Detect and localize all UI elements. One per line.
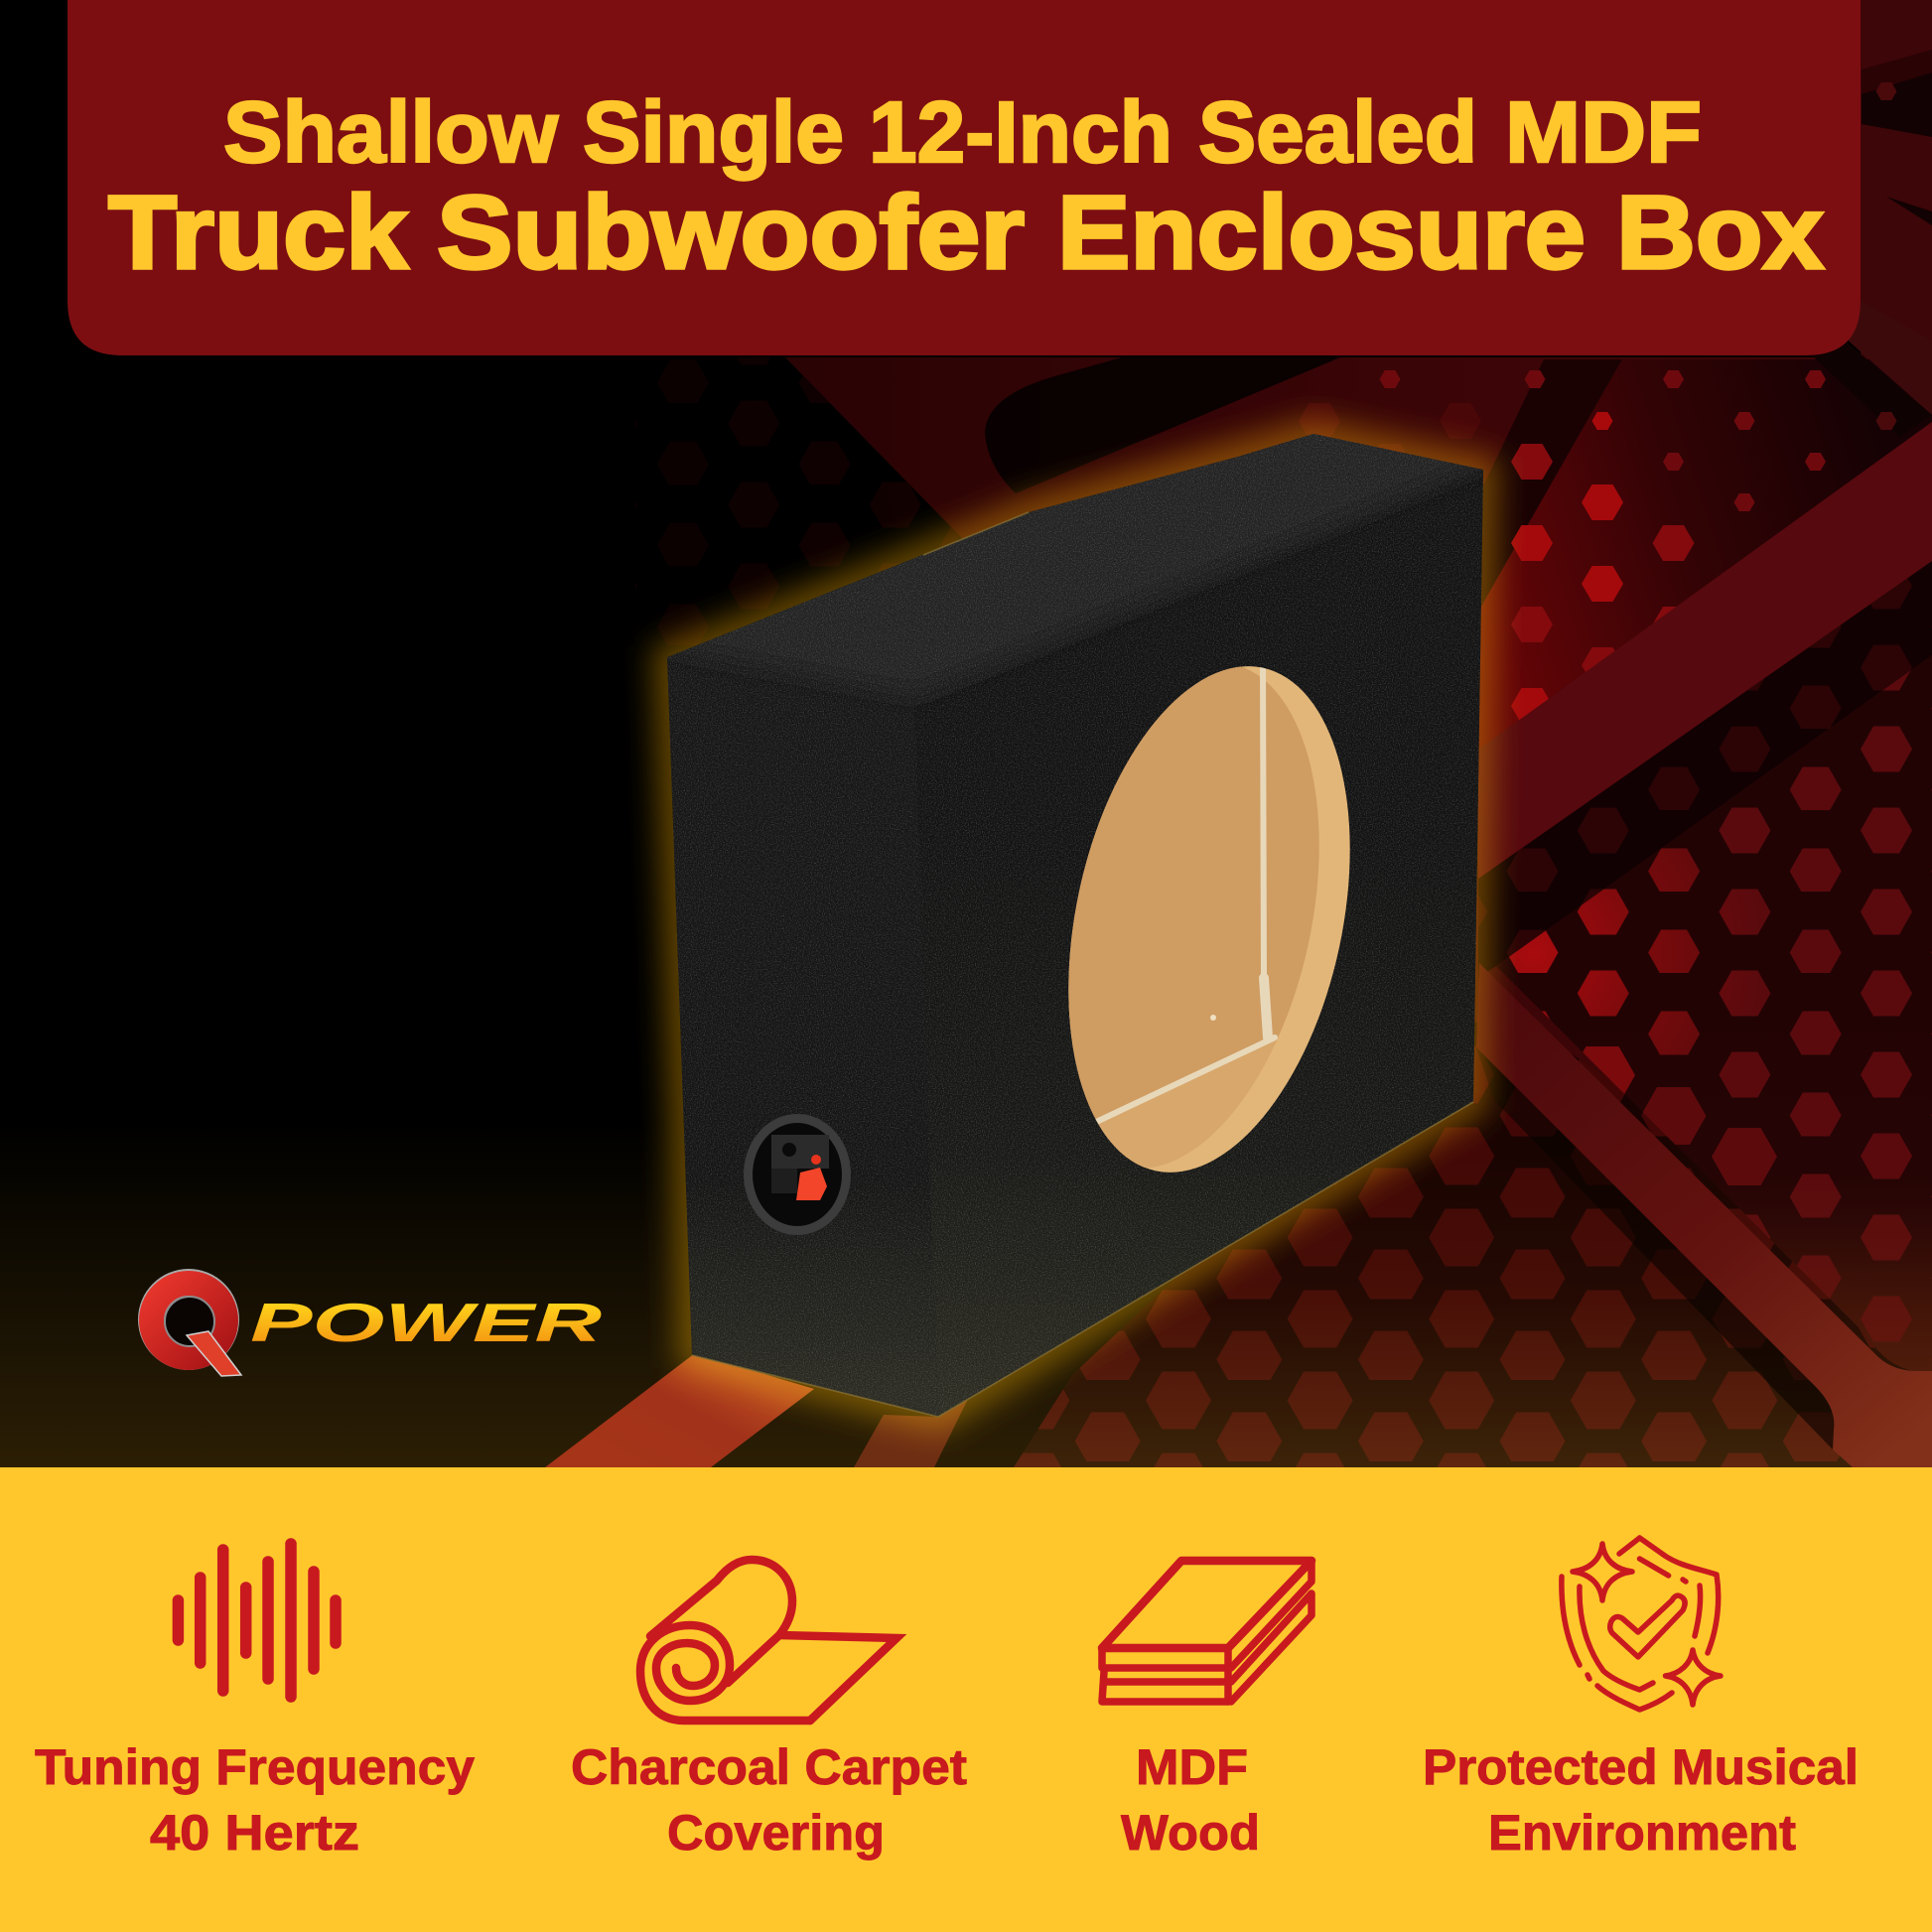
label: charcoal carpet: Charcoal Carpet <box>571 1739 967 1795</box>
title line one: Sealed <box>1198 84 1477 181</box>
label: tuning frequency <box>35 1739 475 1861</box>
diagonal band upper <box>1478 422 1932 879</box>
title line two: Truck <box>108 175 409 291</box>
box glow <box>667 434 1483 1417</box>
floor tint <box>0 1122 1932 1467</box>
top right corner strips <box>1812 0 1932 437</box>
features panel <box>0 1467 1932 1932</box>
lower hexagon field <box>1014 1023 1910 1467</box>
title line two: Enclosure <box>1057 175 1586 291</box>
title line one: Single <box>583 84 844 181</box>
label: tuning frequency: 40 Hertz <box>150 1805 359 1861</box>
hero background: black with red geometric bands and hexagons <box>0 0 1932 1467</box>
round speaker cut-out with MDF rim <box>1068 666 1350 1173</box>
label: protected environment <box>1423 1739 1859 1861</box>
icon: stacked boards <box>1102 1561 1311 1702</box>
feature: tuning frequency <box>35 1544 475 1861</box>
orange wedge under box corner <box>854 1395 970 1467</box>
icon: shield with check and sparkles <box>1562 1538 1721 1710</box>
label: charcoal carpet: Covering <box>667 1805 885 1861</box>
brand logo: Q Power <box>138 1269 602 1376</box>
icon: carpet roll <box>640 1560 897 1721</box>
dark rounded wedge behind the box top <box>985 357 1340 493</box>
label: MDF wood <box>1121 1739 1260 1861</box>
title line two: Box <box>1616 175 1824 291</box>
icon: sound wave <box>178 1544 336 1697</box>
title line one: MDF <box>1505 84 1702 181</box>
label: tuning frequency: Tuning Frequency <box>35 1739 475 1795</box>
title line one: Shallow <box>223 84 558 181</box>
feature: charcoal carpet <box>571 1560 967 1861</box>
orange band lower left <box>545 1353 814 1467</box>
right hexagon panel <box>1469 645 1932 1380</box>
label: protected environment: Protected Musical <box>1423 1739 1859 1795</box>
title line one: 12-Inch <box>869 84 1173 181</box>
diagonal band lower merging into orange corner <box>1476 963 1932 1467</box>
feature: protected environment <box>1423 1538 1859 1861</box>
dark band under the upper diagonal <box>1469 556 1932 983</box>
speaker terminal cup <box>744 1114 851 1235</box>
shadow strip under lower diagonal with rounded end <box>1476 1047 1834 1449</box>
logo Q mark <box>138 1269 241 1376</box>
header banner <box>68 0 1861 355</box>
label: charcoal carpet <box>571 1739 967 1861</box>
label: MDF wood: Wood <box>1121 1805 1260 1861</box>
product: carpeted subwoofer enclosure box <box>655 417 1499 1420</box>
label: MDF wood: MDF <box>1136 1739 1248 1795</box>
feature: MDF wood <box>1102 1561 1311 1861</box>
box faces <box>655 417 1499 1420</box>
logo wordmark: POWER <box>250 1292 602 1353</box>
label: protected environment: Environment <box>1488 1805 1796 1861</box>
glue seams <box>1092 665 1275 1124</box>
title line two: Subwoofer <box>437 175 1025 291</box>
